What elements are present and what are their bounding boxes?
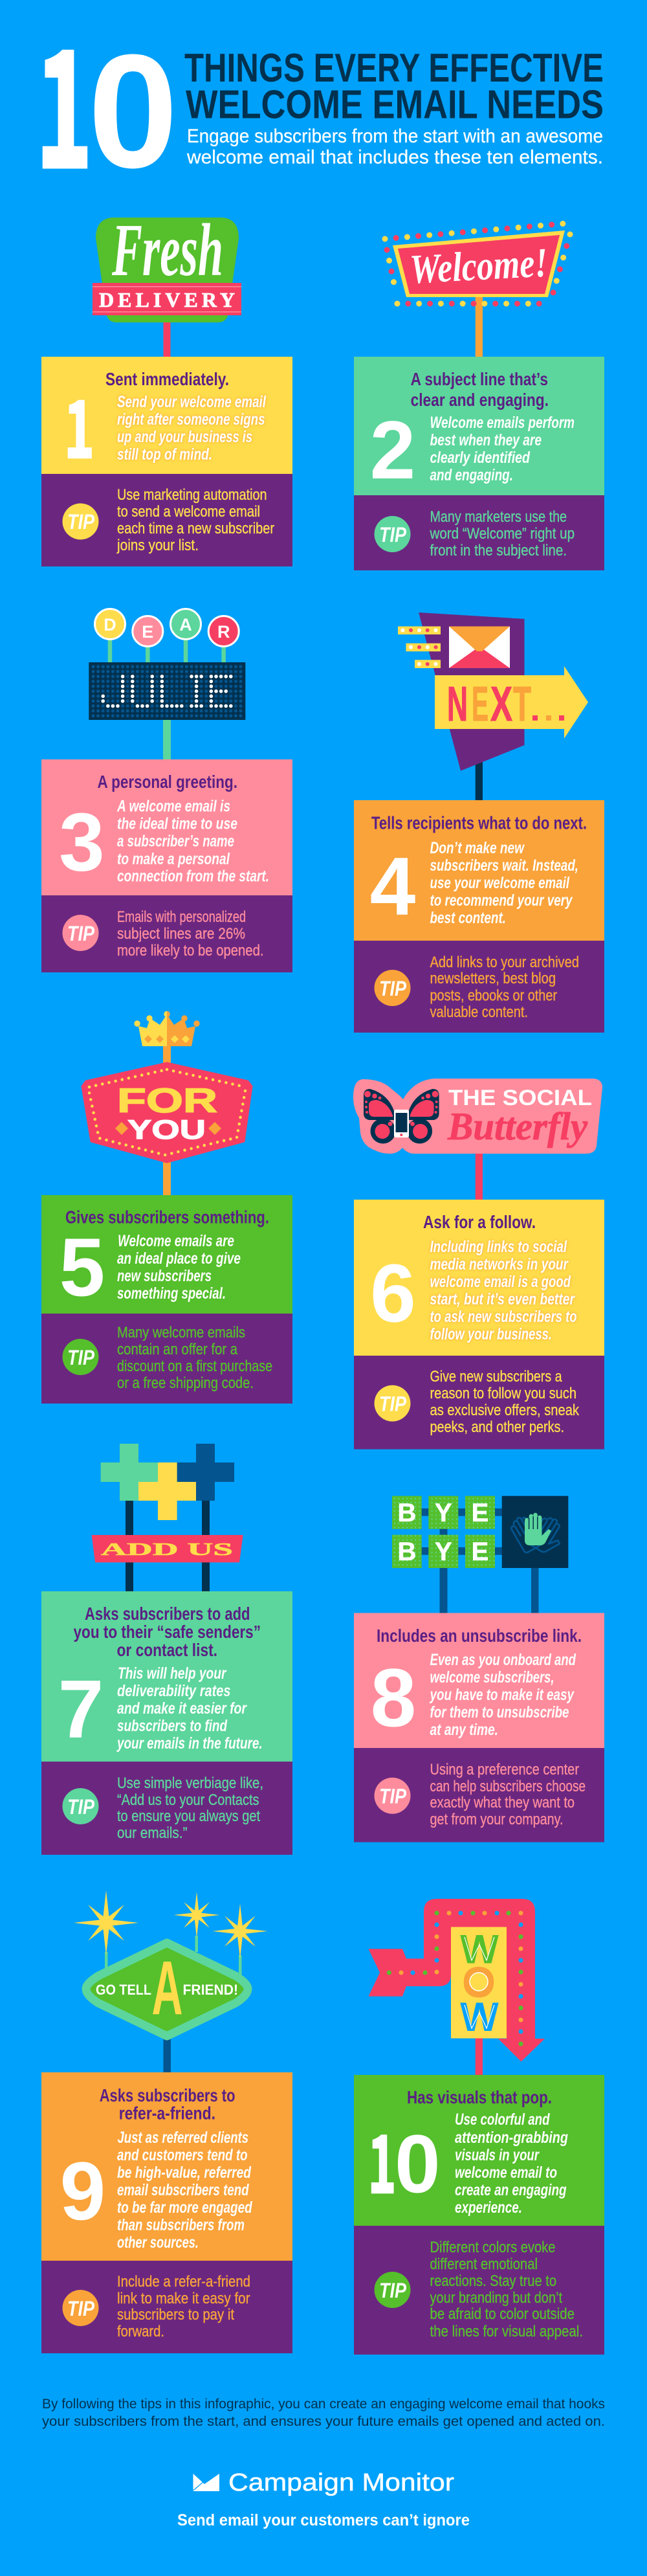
main block xyxy=(354,1200,604,1356)
tip text: Add links to your archived xyxy=(430,954,579,971)
body text: at any time. xyxy=(430,1721,498,1739)
tip badge xyxy=(62,2290,98,2326)
panel 8: unsubscribe link xyxy=(354,1613,604,1842)
tip text: Many marketers use the xyxy=(430,508,567,526)
body text: start, but it’s even better xyxy=(430,1290,575,1308)
wow lettering: W xyxy=(460,1995,499,2040)
tip badge: TIP xyxy=(67,510,95,533)
body text: deliverability rates xyxy=(117,1682,231,1700)
number: 5 xyxy=(60,1221,105,1313)
heading: clear and engaging. xyxy=(411,390,549,410)
main block xyxy=(41,1591,292,1762)
panel 5: gives something xyxy=(41,1195,292,1404)
arrow xyxy=(435,666,588,739)
sign: the social butterfly: THE SOCIAL xyxy=(448,1086,592,1110)
heading: or contact list. xyxy=(116,1640,217,1660)
number: 0 xyxy=(395,2118,441,2210)
body text: something special. xyxy=(117,1284,226,1303)
wow lettering xyxy=(460,1927,499,2040)
body text: create an engaging xyxy=(455,2181,567,2199)
sign: go tell a friend: A xyxy=(151,1945,182,2031)
tip text: word “Welcome” right up xyxy=(430,525,575,543)
letter tiles: B xyxy=(398,1499,416,1527)
body text: Welcome emails perform xyxy=(430,414,575,432)
tip badge: TIP xyxy=(67,1346,95,1369)
body text: be high-value, referred xyxy=(117,2164,252,2182)
panel 4: what to do next xyxy=(354,800,604,1033)
sign: add us: ADD US xyxy=(101,1540,233,1559)
number: 3 xyxy=(59,796,105,888)
tip text: to send a welcome email xyxy=(117,503,260,521)
heading: Asks subscribers to xyxy=(100,2085,236,2105)
body text xyxy=(116,1664,263,1753)
waving hand box xyxy=(502,1496,569,1568)
tip text xyxy=(117,908,264,959)
body text: to recommend your very xyxy=(430,891,573,910)
heading: you to their “safe senders” xyxy=(74,1622,261,1642)
sign: wow xyxy=(369,1899,545,2076)
sign: fresh delivery: DELIVERY xyxy=(99,288,235,311)
tip block xyxy=(41,895,292,972)
body text: right after someone signs xyxy=(117,410,265,429)
body text: and customers tend to xyxy=(117,2146,248,2164)
subtitle: Engage subscribers from the start with an awesome xyxy=(187,126,603,147)
heading: Ask for a follow. xyxy=(423,1212,536,1232)
tip badge: TIP xyxy=(379,2279,407,2302)
big number 10 xyxy=(36,0,178,214)
tip text xyxy=(117,2273,250,2340)
tip text: more likely to be opened. xyxy=(117,942,264,959)
tip text xyxy=(430,508,575,559)
sign: fresh delivery xyxy=(93,209,241,358)
tip block xyxy=(354,941,604,1033)
body text: your emails in the future. xyxy=(116,1734,263,1753)
number xyxy=(367,2101,441,2216)
main block xyxy=(41,1195,292,1314)
sign: welcome xyxy=(385,223,574,358)
heading: Includes an unsubscribe link. xyxy=(377,1626,582,1646)
next lettering xyxy=(447,677,564,731)
main block xyxy=(354,2075,604,2226)
body text: follow your business. xyxy=(430,1325,552,1343)
body text: Use colorful and xyxy=(455,2111,550,2129)
closing paragraph: By following the tips in this infographic, you can create an engaging welcome email that hooks xyxy=(42,2397,605,2412)
butterfly icon xyxy=(364,1089,439,1143)
number: 8 xyxy=(371,1652,416,1744)
letter tiles: Y xyxy=(435,1538,452,1566)
tip text: peeks, and other perks. xyxy=(430,1418,564,1436)
main block xyxy=(41,357,292,474)
body text: media networks in your xyxy=(430,1255,569,1273)
bulbs xyxy=(387,1911,523,2046)
body text: Send your welcome email xyxy=(117,393,267,411)
body text: subscribers to find xyxy=(117,1717,228,1735)
tip badge xyxy=(62,1339,98,1375)
header xyxy=(36,0,604,214)
body text: and engaging. xyxy=(430,466,513,484)
tagline: Send email your customers can’t ignore xyxy=(177,2511,470,2529)
subtitle: welcome email that includes these ten elements. xyxy=(186,147,603,168)
letter tiles xyxy=(392,1496,495,1568)
tip text xyxy=(430,954,579,1021)
closing paragraph: your subscribers from the start, and ensures your future emails get opened and acted on. xyxy=(42,2414,605,2429)
heading: Asks subscribers to add xyxy=(85,1604,250,1624)
sign: the social butterfly: Butterfly xyxy=(447,1105,587,1148)
body text: email subscribers tend xyxy=(117,2181,249,2199)
tip text: the lines for visual appeal. xyxy=(430,2323,583,2340)
sign: the social butterfly xyxy=(353,1079,602,1201)
letter tiles: E xyxy=(472,1538,488,1566)
panel 1: sent immediately xyxy=(41,357,292,566)
subtitle xyxy=(186,126,603,168)
tip text: front in the subject line. xyxy=(430,542,567,559)
sign: dear julie xyxy=(89,609,245,761)
body text: to be far more engaged xyxy=(117,2199,252,2217)
body text: to ask new subscribers to xyxy=(430,1308,577,1326)
body text: other sources. xyxy=(117,2234,199,2252)
tip badge xyxy=(62,504,98,540)
sign: add us xyxy=(92,1444,243,1593)
tip text: Many welcome emails xyxy=(117,1324,245,1341)
tip text: Use simple verbiage like, xyxy=(117,1775,263,1792)
tip block xyxy=(41,2261,292,2353)
body text xyxy=(430,1238,577,1343)
wow lettering: O xyxy=(463,1959,495,2006)
body text xyxy=(430,839,578,927)
tip block xyxy=(41,1314,292,1404)
body text: to make a personal xyxy=(117,850,230,868)
next lettering: N xyxy=(447,677,468,731)
main block xyxy=(41,2072,292,2261)
tip text: can help subscribers choose xyxy=(430,1778,586,1795)
crown xyxy=(134,1011,200,1046)
tip badge: TIP xyxy=(67,2297,95,2320)
tip badge: TIP xyxy=(67,922,95,945)
body text: attention-grabbing xyxy=(455,2129,568,2147)
tip text: Include a refer-a-friend xyxy=(117,2273,250,2290)
tip text: joins your list. xyxy=(116,537,199,554)
tip badge xyxy=(62,915,98,951)
sign: for you xyxy=(82,1011,252,1198)
tip text: our emails.” xyxy=(117,1824,188,1842)
body text xyxy=(455,2111,568,2217)
body text: Even as you onboard and xyxy=(430,1651,576,1669)
number: 9 xyxy=(60,2145,105,2237)
tip text: posts, ebooks or other xyxy=(430,987,557,1005)
tip badge xyxy=(374,1778,410,1814)
heading: Tells recipients what to do next. xyxy=(371,813,587,833)
main block xyxy=(354,800,604,941)
sign: for you: YOU xyxy=(127,1114,206,1145)
campaign monitor logo xyxy=(193,2469,454,2496)
body text: than subscribers from xyxy=(117,2216,245,2234)
heading: A personal greeting. xyxy=(97,772,237,792)
tip text: newsletters, best blog xyxy=(430,970,556,987)
body text xyxy=(116,798,269,885)
tip text xyxy=(117,1775,263,1842)
body text: you have to make it easy xyxy=(429,1686,575,1704)
panel 3: personal greeting xyxy=(41,759,292,972)
tip block xyxy=(354,1356,604,1450)
body text: Don’t make new xyxy=(430,839,525,857)
body text xyxy=(117,393,267,464)
letter tiles: E xyxy=(472,1499,488,1527)
sign: go tell a friend xyxy=(74,1890,268,2074)
body text: clearly identified xyxy=(430,449,531,467)
sign: fresh delivery: Fresh xyxy=(111,209,223,291)
next lettering: X xyxy=(490,677,512,731)
body text: Just as referred clients xyxy=(118,2129,248,2147)
number: 1 xyxy=(64,366,94,481)
tip text: each time a new subscriber xyxy=(117,520,274,537)
tip text xyxy=(430,2239,583,2340)
panel 2: subject line xyxy=(354,357,604,570)
letter tiles: B xyxy=(398,1538,416,1566)
body text: up and your business is xyxy=(117,428,252,446)
tip block xyxy=(41,1762,292,1855)
next lettering: T xyxy=(513,677,531,731)
body text: a subscriber’s name xyxy=(117,833,234,851)
panel 9: refer a friend xyxy=(41,2072,292,2353)
sign: go tell a friend: GO TELL xyxy=(96,1982,151,1998)
tip text: reactions. Stay true to xyxy=(430,2272,556,2290)
body text: visuals in your xyxy=(455,2146,540,2164)
logo icon xyxy=(193,2474,219,2491)
dear letters: E xyxy=(142,622,153,642)
dear letters: A xyxy=(179,615,192,634)
panel 6: ask for a follow xyxy=(354,1200,604,1450)
body text: the ideal time to use xyxy=(117,815,237,833)
dear letters: R xyxy=(217,622,230,642)
tip text: be afraid to color outside xyxy=(430,2305,575,2323)
tip text: get from your company. xyxy=(430,1811,563,1828)
body text: connection from the start. xyxy=(117,867,269,885)
body text: best when they are xyxy=(430,431,542,449)
body text: Welcome emails are xyxy=(118,1232,234,1250)
tip text: subscribers to pay it xyxy=(117,2306,234,2324)
tip text: valuable content. xyxy=(430,1003,528,1021)
tip text: to ensure you always get xyxy=(117,1808,260,1825)
tip text: subject lines are 26% xyxy=(117,925,245,943)
tip text: as exclusive offers, sneak xyxy=(430,1402,580,1419)
tip text: Give new subscribers a xyxy=(430,1368,562,1385)
tip text: link to make it easy for xyxy=(117,2290,250,2307)
heading: refer-a-friend. xyxy=(119,2103,215,2123)
arrow band xyxy=(369,1899,545,2061)
tip text: or a free shipping code. xyxy=(117,1374,254,1392)
tip text: “Add us to your Contacts xyxy=(117,1791,259,1809)
body text: Including links to social xyxy=(430,1238,567,1256)
led board xyxy=(89,662,245,720)
closing paragraph xyxy=(42,2397,605,2429)
body text: welcome email is a good xyxy=(430,1273,571,1291)
tip text: Use marketing automation xyxy=(117,486,267,504)
tip badge: TIP xyxy=(379,1393,407,1416)
next lettering: E xyxy=(472,677,488,731)
wow lettering: W xyxy=(460,1927,499,1973)
panel 7: safe senders xyxy=(41,1591,292,1855)
body text: new subscribers xyxy=(117,1267,212,1285)
heading xyxy=(74,1604,261,1660)
tip badge xyxy=(374,970,410,1006)
sign: go tell a friend: FRIEND! xyxy=(182,1982,238,1998)
heading: Has visuals that pop. xyxy=(407,2087,552,2107)
main block xyxy=(41,759,292,895)
main block xyxy=(354,1613,604,1748)
tip text: discount on a first purchase xyxy=(117,1358,272,1375)
body text: experience. xyxy=(455,2199,522,2217)
tip text: forward. xyxy=(117,2323,164,2340)
tip badge: TIP xyxy=(379,523,407,546)
tip block xyxy=(41,474,292,566)
body text: best content. xyxy=(430,909,506,927)
dear letters: D xyxy=(104,615,116,634)
sign: welcome: Welcome! xyxy=(409,239,549,293)
envelope icon xyxy=(449,627,510,668)
body text: and make it easier for xyxy=(117,1699,247,1718)
body text xyxy=(117,1232,241,1303)
crosses xyxy=(101,1444,234,1520)
tip text: exactly what they want to xyxy=(430,1794,575,1811)
body text: A welcome email is xyxy=(116,798,230,816)
tip block xyxy=(354,2226,604,2355)
tip badge: TIP xyxy=(379,1785,407,1808)
tip badge xyxy=(62,1788,98,1824)
tip badge: TIP xyxy=(67,1795,95,1819)
tip text: reason to follow you such xyxy=(430,1385,576,1402)
heading: Gives subscribers something. xyxy=(65,1207,269,1227)
tip block xyxy=(354,495,604,570)
tip text xyxy=(430,1368,580,1436)
stars xyxy=(74,1890,268,1959)
body text xyxy=(430,414,575,484)
body text: an ideal place to give xyxy=(117,1249,241,1268)
led board: JULIE xyxy=(123,667,211,703)
body text xyxy=(429,1651,576,1739)
heading xyxy=(100,2085,236,2123)
wordmark: Campaign Monitor xyxy=(228,2469,454,2496)
number: 2 xyxy=(370,404,415,496)
body text: welcome email to xyxy=(455,2164,557,2182)
tip badge xyxy=(374,2272,410,2308)
sign: bye bye xyxy=(392,1496,569,1615)
sign: next arrow xyxy=(398,612,588,801)
tip block xyxy=(354,1748,604,1842)
sign: for you: FOR xyxy=(117,1082,217,1120)
heading xyxy=(411,369,549,410)
heading: A subject line that’s xyxy=(411,369,548,389)
tip text: Using a preference center xyxy=(430,1761,579,1778)
tip text: different emotional xyxy=(430,2256,538,2273)
heading: Sent immediately. xyxy=(105,369,229,389)
tip text xyxy=(117,1324,272,1392)
body text: for them to unsubscribe xyxy=(430,1703,569,1721)
body text: use your welcome email xyxy=(430,874,570,892)
body text xyxy=(117,2129,252,2252)
tip badge xyxy=(374,516,410,552)
tip text xyxy=(430,1761,586,1828)
main block xyxy=(354,357,604,495)
tip badge xyxy=(374,1385,410,1422)
letter tiles: Y xyxy=(435,1499,452,1527)
tip badge: TIP xyxy=(379,977,407,1000)
big number 10: 0 xyxy=(88,21,178,201)
tip text: Different colors evoke xyxy=(430,2239,555,2256)
light bars xyxy=(398,627,441,668)
tip text: your branding but don’t xyxy=(430,2289,562,2307)
number: 1 xyxy=(367,2101,396,2216)
body text: still top of mind. xyxy=(117,445,212,464)
panel 10: visuals that pop xyxy=(354,2075,604,2355)
tip text: Emails with personalized xyxy=(117,908,246,926)
dear letters xyxy=(94,609,239,646)
tip text xyxy=(116,486,274,554)
number: 6 xyxy=(370,1247,416,1339)
yellow box xyxy=(451,1927,507,2038)
body text: subscribers wait. Instead, xyxy=(430,857,578,875)
number: 4 xyxy=(370,840,415,932)
body text: welcome subscribers, xyxy=(430,1668,554,1686)
tip text: contain an offer for a xyxy=(117,1341,238,1358)
number: 7 xyxy=(58,1663,104,1754)
title xyxy=(184,46,604,127)
body text: This will help your xyxy=(118,1664,226,1683)
